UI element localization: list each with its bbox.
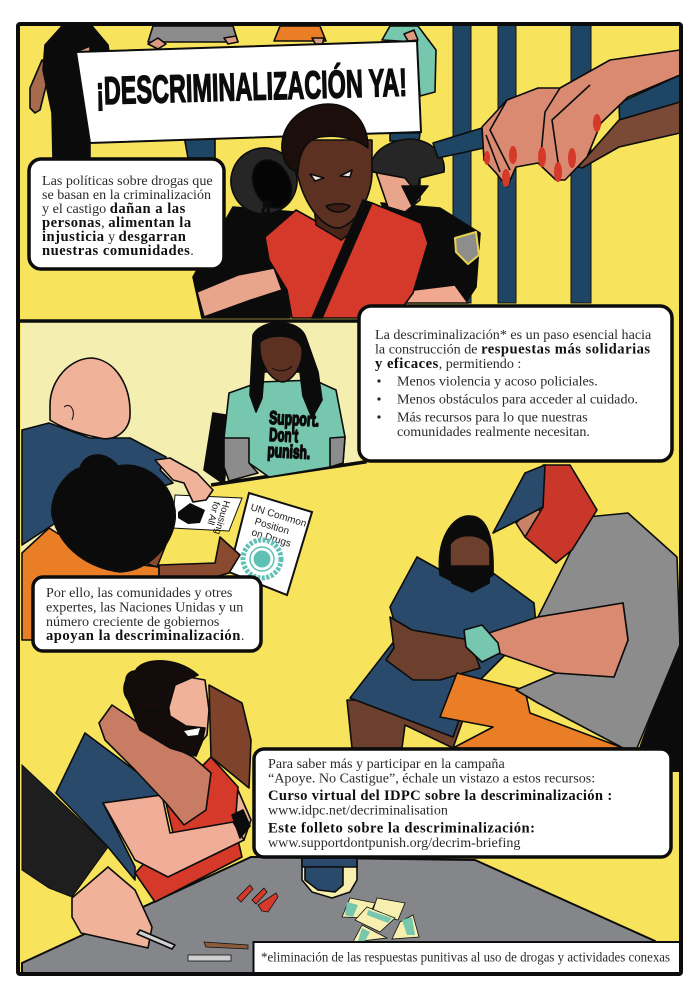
panel: hug and table xyxy=(22,661,655,973)
protesters holding sign xyxy=(30,26,436,160)
leaflet: UN common position: UN Common xyxy=(249,502,308,530)
person in orange shirt with black hair xyxy=(22,455,240,640)
panel: prison and arrest scene xyxy=(30,25,680,318)
leaflet: housing for all xyxy=(172,495,242,536)
pale wall xyxy=(21,322,360,560)
text box: resources: Este folleto sobre la descriminalización: xyxy=(268,820,535,836)
text box: resources: www.supportdontpunish.org/decrim-briefing xyxy=(268,835,520,851)
person in balaclava with gray shirt xyxy=(440,465,680,748)
leaflet: housing for all: Housing xyxy=(212,499,232,536)
text box: criminalization: Las políticas sobre drogas que xyxy=(42,173,213,189)
police officer right xyxy=(371,139,480,303)
leaflet: housing for all: for All xyxy=(205,500,222,526)
t-shirt slogan: punish. xyxy=(267,440,311,463)
leaflet: UN common position: on Drugs xyxy=(250,527,292,550)
hands gripping bars xyxy=(433,50,680,187)
black jacket sleeve xyxy=(22,765,108,897)
table xyxy=(22,857,655,973)
leaflet: UN common position xyxy=(229,493,312,595)
footnote xyxy=(254,942,682,973)
woman with face mask xyxy=(347,516,536,748)
icon: UN emblem xyxy=(243,540,281,578)
straws and supplies xyxy=(188,885,419,961)
text box: criminalization: nuestras comunidades. xyxy=(42,243,194,259)
text box: support for decriminalization: apoyan la descriminalización. xyxy=(46,628,244,644)
text box: resources xyxy=(254,749,671,857)
arrested man in red shirt xyxy=(265,104,428,318)
t-shirt slogan xyxy=(267,407,320,463)
text box: criminalization xyxy=(29,159,224,269)
cream packets xyxy=(342,898,419,942)
text box: decriminalization benefits: la construcción de respuestas más solidarias xyxy=(375,342,651,358)
text box: decriminalization benefits xyxy=(359,306,672,461)
bald man xyxy=(22,358,213,545)
bullet list: Menos violencia y acoso policiales. xyxy=(397,374,598,390)
text box: criminalization: injusticia y desgarran xyxy=(42,229,186,245)
t-shirt slogan: Don't xyxy=(269,424,299,446)
text box: decriminalization benefits: y eficaces, permitiendo : xyxy=(375,356,521,372)
title: ¡DESCRIMINALIZACIÓN YA! xyxy=(96,61,408,113)
black shape at right edge xyxy=(632,640,680,772)
text box: decriminalization benefits: La descriminalización* es un paso esencial hacia xyxy=(375,327,652,343)
panel: harm reduction care xyxy=(347,465,680,772)
footnote: *eliminación de las respuestas punitivas al uso de drogas y actividades conexas xyxy=(261,950,670,966)
text box: resources: Para saber más y participar en la campaña xyxy=(268,756,505,772)
bullet list: Más recursos para lo que nuestras xyxy=(397,410,588,426)
text box: criminalization: y el castigo dañan a las xyxy=(42,201,186,217)
jail bars xyxy=(453,25,591,303)
police officer left xyxy=(193,137,308,318)
text box: support for decriminalization: número creciente de gobiernos xyxy=(46,614,219,630)
woman in support shirt xyxy=(204,323,345,484)
embracing couple xyxy=(56,661,251,902)
t-shirt slogan: Support. xyxy=(269,407,320,430)
protest banner xyxy=(76,41,421,143)
text box: support for decriminalization: Por ello, las comunidades y otres xyxy=(46,585,232,601)
text box: support for decriminalization: expertes, las Naciones Unidas y un xyxy=(46,600,243,616)
text box: criminalization: se basan en la criminalización xyxy=(42,187,211,203)
bullet list xyxy=(377,374,638,440)
text box: resources: www.idpc.net/decriminalisation xyxy=(268,802,448,818)
bullet list: Menos obstáculos para acceder al cuidado. xyxy=(397,392,638,408)
panel: community meeting xyxy=(20,321,365,640)
hand with straw xyxy=(72,867,175,949)
leaflet: UN common position: Position xyxy=(253,516,290,537)
text box: resources: Curso virtual del IDPC sobre la descriminalización : xyxy=(268,788,613,804)
text box: criminalization: personas, alimentan la xyxy=(42,215,192,231)
red syringes xyxy=(237,885,278,912)
panel border xyxy=(20,321,365,485)
bottle cap xyxy=(302,858,357,898)
text box: resources: “Apoye. No Castigue”, échale un vistazo a estos recursos: xyxy=(268,770,595,786)
text box: support for decriminalization xyxy=(33,577,261,651)
bullet list: comunidades realmente necesitan. xyxy=(397,424,590,440)
police officer left: POLICE xyxy=(254,200,275,239)
